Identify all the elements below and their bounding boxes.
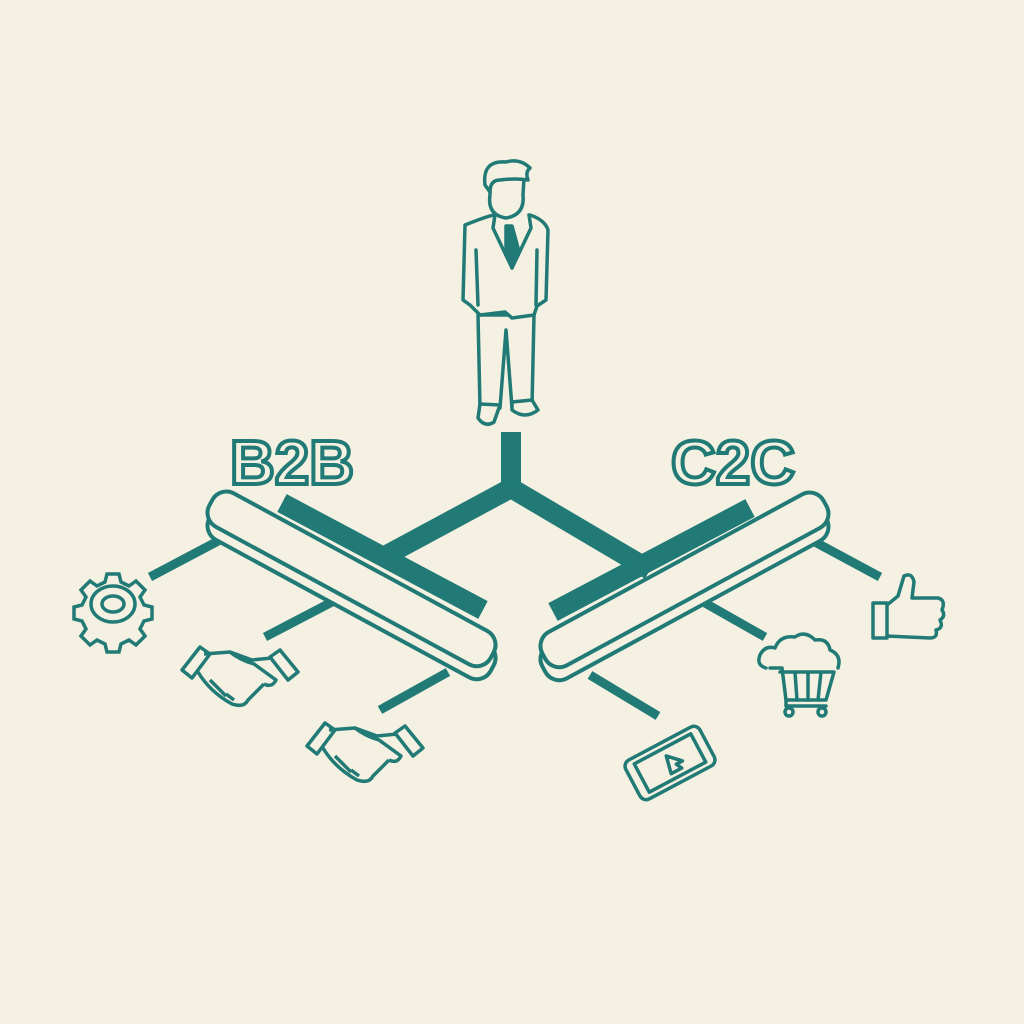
icon: phone <box>623 724 717 802</box>
plank: C2C <box>535 487 834 686</box>
thin connector lines <box>150 540 880 716</box>
connector tree <box>282 432 750 612</box>
icon: handshake 2 <box>307 723 423 781</box>
label C2C: C2C <box>671 429 795 498</box>
icon: gear <box>74 574 152 652</box>
icon: cloud cart <box>759 634 839 716</box>
plank: B2B <box>202 486 501 685</box>
icon: handshake 1 <box>182 647 298 705</box>
icon: thumbs up <box>873 575 944 638</box>
label B2B: B2B <box>230 429 354 498</box>
person <box>463 161 548 424</box>
